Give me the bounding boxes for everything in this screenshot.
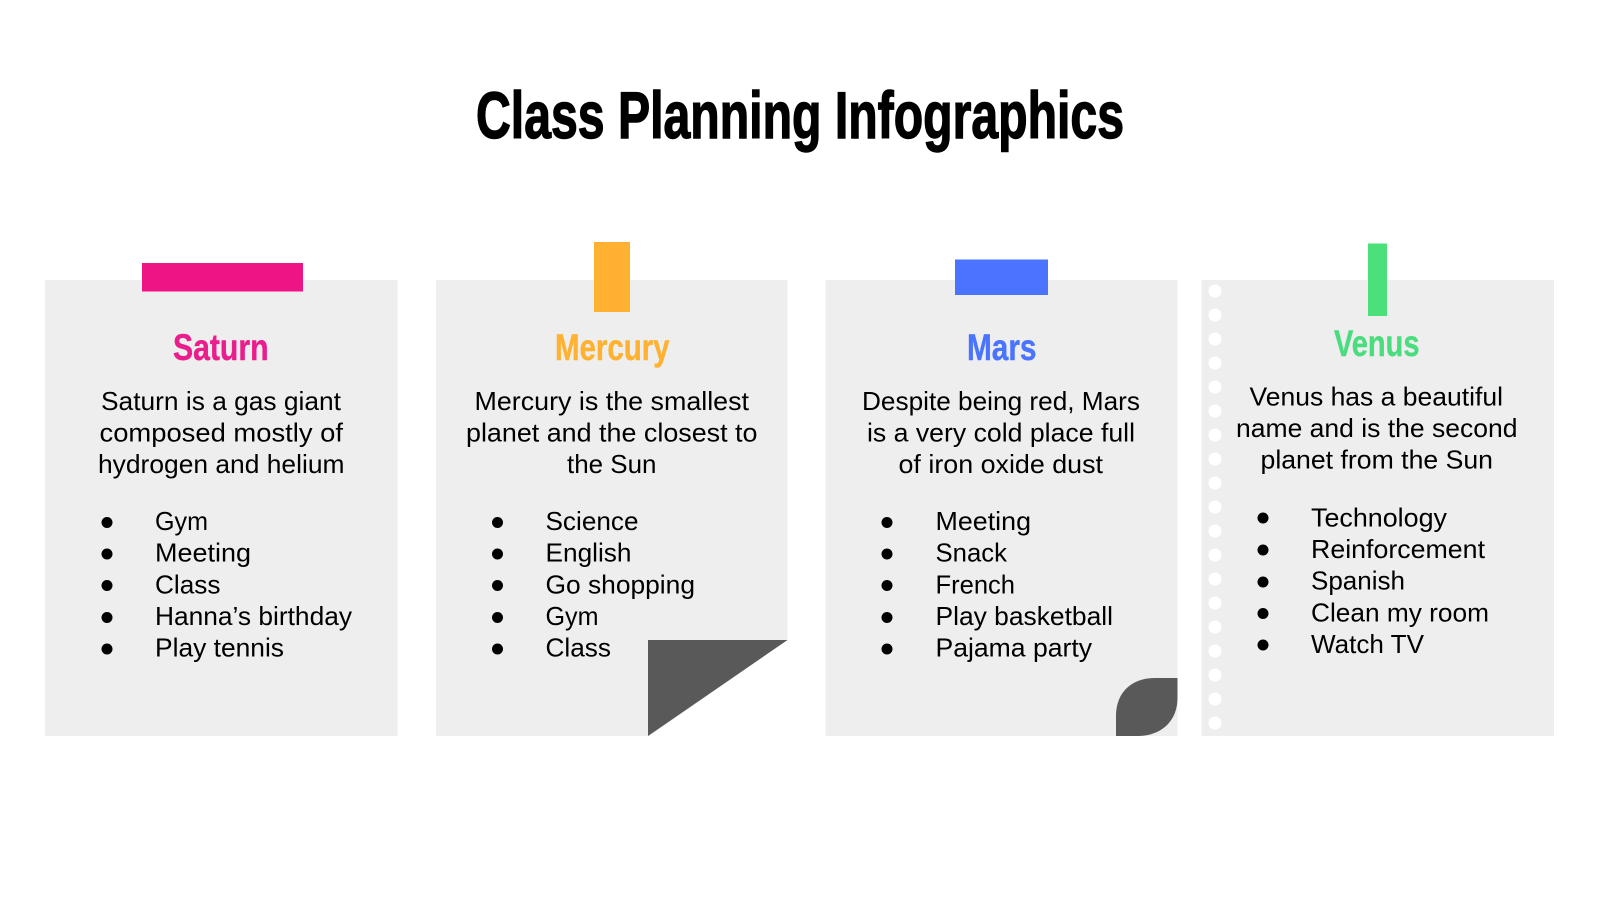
list: Venus: Technology	[1311, 502, 1447, 532]
description: Saturn: hydrogen and helium	[98, 449, 344, 479]
list: Mars: French	[936, 570, 1015, 600]
list: Mercury: Gym	[546, 601, 598, 631]
tape: blue	[955, 260, 1048, 295]
list: Mercury	[492, 506, 695, 662]
panel background	[436, 280, 788, 736]
panel: Mercury	[436, 242, 788, 737]
tape: pink	[142, 263, 303, 292]
list: Mercury: Science	[546, 506, 638, 536]
list: Saturn: Play tennis	[155, 632, 284, 662]
notebook holes	[1208, 284, 1222, 730]
panel background	[1202, 280, 1554, 736]
list: Saturn: Hanna’s birthday	[155, 601, 352, 631]
curled corner leaf	[1116, 678, 1178, 736]
description: Mercury: the Sun	[567, 449, 656, 479]
list: Mars: Snack	[936, 538, 1008, 568]
list: Mercury: English	[546, 538, 632, 568]
list: Mercury: Go shopping	[546, 570, 695, 600]
list: Venus	[1258, 502, 1489, 659]
list: Mars	[882, 506, 1113, 662]
panel: Venus	[1202, 244, 1554, 736]
description: Mars: Despite being red, Mars	[862, 386, 1140, 416]
description: Venus: name and is the second	[1236, 413, 1518, 443]
list: Saturn: Meeting	[155, 538, 251, 568]
list: Venus: Spanish	[1311, 566, 1405, 596]
description: Saturn	[98, 386, 344, 479]
list: Saturn	[102, 506, 352, 662]
heading: Mercury: Mercury	[555, 327, 670, 368]
description: Venus: Venus has a beautiful	[1250, 382, 1503, 412]
list: Mars: Play basketball	[936, 601, 1113, 631]
description: Mercury	[466, 386, 758, 479]
heading: Venus: Venus	[1334, 323, 1420, 364]
list: Venus: Watch TV	[1311, 629, 1425, 659]
folded corner cut-out	[648, 640, 788, 737]
description: Mars: of iron oxide dust	[898, 449, 1104, 479]
list: Venus: Clean my room	[1311, 598, 1489, 628]
description: Mercury: Mercury is the smallest	[474, 386, 750, 416]
description: Saturn: Saturn is a gas giant	[101, 386, 342, 416]
folded corner flap	[648, 640, 788, 736]
heading: Saturn: Saturn	[173, 327, 268, 368]
title: Class Planning Infographics	[476, 78, 1124, 152]
description: Mercury: planet and the closest to	[466, 418, 758, 448]
description: Venus	[1236, 382, 1518, 474]
list: Mars: Meeting	[936, 506, 1031, 536]
description: Mars: is a very cold place full	[867, 418, 1135, 448]
list: Mercury: Class	[546, 632, 611, 662]
description: Mars	[862, 386, 1140, 479]
list: Saturn: Class	[155, 570, 220, 600]
panel background	[45, 280, 398, 736]
panel: Saturn	[45, 263, 398, 736]
heading: Mars: Mars	[967, 327, 1036, 368]
panel: Mars	[826, 260, 1178, 736]
description: Saturn: composed mostly of	[100, 418, 344, 448]
tape: orange	[594, 242, 630, 312]
tape: green	[1368, 244, 1387, 316]
panel background	[826, 280, 1178, 736]
list: Venus: Reinforcement	[1311, 534, 1486, 564]
list: Saturn: Gym	[155, 506, 208, 536]
list: Mars: Pajama party	[936, 632, 1092, 662]
description: Venus: planet from the Sun	[1260, 444, 1493, 474]
